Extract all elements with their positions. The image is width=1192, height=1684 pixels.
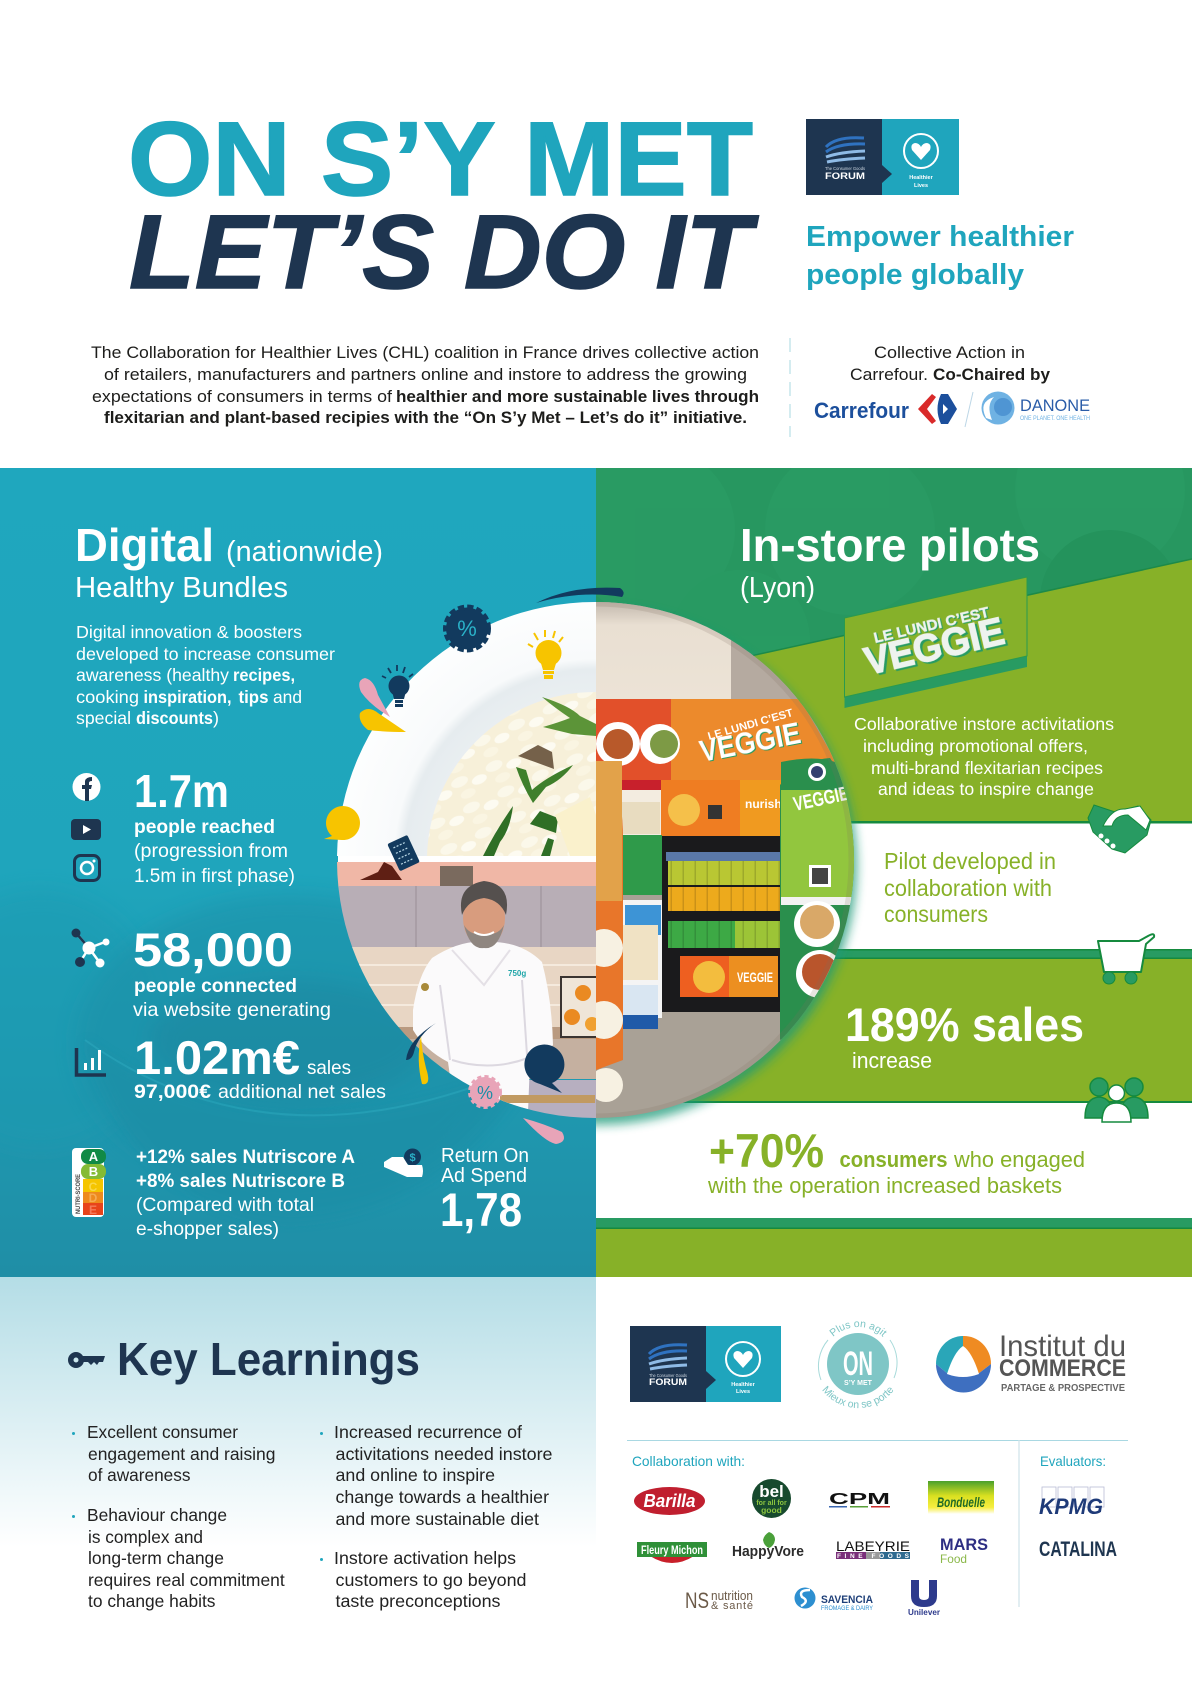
logo: Labeyrie [836, 1538, 910, 1560]
accent: yellow drop [360, 709, 406, 732]
digital description: tips [238, 687, 269, 707]
key learnings: right column: and more sustainable diet [336, 1509, 539, 1529]
stat: 58,000 connected: people connected [134, 975, 297, 997]
circle: store shelf photo: LE LUNDI C’EST [707, 707, 795, 743]
circle: store shelf photo: nurishh [745, 797, 789, 811]
digital heading: Digital [75, 519, 214, 571]
accent: pink drop [359, 678, 390, 717]
digital description: developed to increase consumer [76, 644, 335, 664]
accent: yellow swoosh [419, 1036, 428, 1084]
key learnings: left column: engagement and raising [88, 1444, 276, 1464]
stat: 1.7m reached: (progression from [134, 840, 288, 862]
co-chair text: Collective Action in [874, 343, 1025, 362]
digital description: awareness (healthy [76, 665, 229, 685]
logo: nutrition & sante: NS [685, 1588, 709, 1613]
in-store description: and ideas to inspire change [878, 779, 1094, 799]
logo: Savencia [794, 1588, 873, 1612]
digital description: and [273, 687, 302, 707]
stat: return on ad spend [440, 1145, 529, 1236]
logo: Labeyrie: LABEYRIE [836, 1538, 910, 1554]
icon: hand with coin: $ [409, 1152, 416, 1164]
circle: chef photo: 750g [508, 969, 526, 978]
logo: Consumer Goods Forum Healthier Lives: The Consumer Goods [825, 166, 866, 171]
tagline: people globally [806, 259, 1024, 291]
text: pilot developed [884, 848, 1056, 927]
circle: store shelf photo: VEGGIE [737, 969, 773, 985]
stat: +70% consumers: +70% [709, 1124, 824, 1177]
logo: Bel: for all for [756, 1500, 787, 1507]
stat: 1.02m sales: additional net sales [218, 1081, 386, 1103]
key learnings: right column: activitations needed instore [336, 1444, 552, 1464]
intro paragraph: flexitarian and plant-based recipies with the “On S’y Met – Let’s do it” initiative. [104, 408, 747, 427]
logo: Savencia: SAVENCIA [821, 1594, 873, 1606]
circle: chef photo [337, 862, 599, 1120]
stat: +70% consumers: consumers [840, 1147, 948, 1172]
logo: on s'y met badge: S’Y MET [844, 1380, 873, 1387]
icon: hand with coin [384, 1148, 423, 1177]
icon: shopping cart [1098, 934, 1154, 984]
logo: HappyVore: HappyVore [732, 1543, 804, 1560]
logo: Consumer Goods Forum Healthier Lives: FORUM [825, 171, 865, 181]
logo: institut du commerce: PARTAGE & PROSPECTIVE [1001, 1383, 1125, 1394]
digital description: recipes, [233, 665, 295, 685]
logo: Danone: ONE PLANET. ONE HEALTH [1020, 416, 1090, 422]
logo: Mars Food [940, 1535, 988, 1566]
in-store description: including promotional offers, [863, 736, 1088, 756]
logo: Labeyrie: FINE FOODS [837, 1553, 910, 1560]
intro paragraph: expectations of consumers in terms of [92, 387, 392, 406]
icon: nutri-score: B [89, 1164, 98, 1179]
stat: 1.02m sales [134, 1031, 386, 1103]
text: pilot developed: collaboration with [884, 875, 1052, 901]
icon: bar chart [76, 1048, 106, 1075]
heading: key learnings: Key Learnings [117, 1333, 420, 1385]
stat: nutriscore sales: e-shopper sales) [136, 1218, 279, 1240]
icon: discount badge [446, 608, 488, 650]
label: evaluators: Evaluators: [1040, 1453, 1106, 1469]
in-store heading: (Lyon) [740, 572, 815, 604]
intro paragraph: The Collaboration for Healthier Lives (CHL) coalition in France drives collective action [91, 343, 759, 362]
icon: nutri-score [72, 1148, 106, 1217]
icon: facebook [72, 773, 100, 801]
logo: Carrefour [814, 394, 957, 424]
accent: yellow speech bubble [324, 806, 360, 840]
icon: pink discount badge [470, 1077, 500, 1107]
icon: nutri-score: D [89, 1191, 98, 1205]
key learnings: left column: Behaviour change [87, 1505, 227, 1525]
circle: store shelf photo: VEGGIE [697, 715, 803, 769]
accent: navy swoosh [406, 1023, 436, 1060]
title: On S'y Met / Let's do it: LET’S DO IT [129, 194, 759, 311]
key learnings: left column [72, 1422, 285, 1611]
key learnings: right column: and online to inspire [336, 1465, 495, 1485]
stat: 1.7m reached: 1.7m [134, 765, 229, 817]
logo: on s'y met badge [818, 1321, 898, 1408]
logo: Consumer Goods Forum Healthier Lives: Lives [914, 183, 928, 189]
digital heading [75, 519, 383, 604]
logo: HappyVore [732, 1532, 804, 1560]
logo: nutrition & sante: & santé [711, 1600, 753, 1612]
icon: nutri-score: NUTRI-SCORE [76, 1174, 82, 1214]
stat: 58,000 connected: via website generating [133, 999, 331, 1021]
logo: Unilever: Unilever [908, 1608, 940, 1617]
logo: Bonduelle: Bonduelle [937, 1494, 985, 1510]
logo: on s'y met badge: Mieux on se porte [822, 1386, 894, 1408]
title: On S'y Met / Let's do it: ON S’Y MET [128, 101, 753, 218]
stat: return on ad spend: Return On [441, 1145, 529, 1167]
stat: +70% consumers: who engaged [953, 1147, 1085, 1172]
in-store description: Collaborative instore activitations [854, 714, 1114, 734]
logo: Fleury Michon: Fleury Michon [641, 1543, 703, 1557]
logo: Consumer Goods Forum Healthier Lives [806, 119, 959, 195]
stat: 189% sales: 189% sales [845, 998, 1084, 1051]
icon: handshake [1088, 805, 1151, 853]
intro paragraph: of retailers, manufacturers and partners online and instore to address the growing [104, 365, 747, 384]
logo: Danone [982, 392, 1090, 424]
key learnings: left column: of awareness [88, 1465, 191, 1485]
key learnings: left column: Excellent consumer [87, 1422, 238, 1442]
logo: Barilla: Barilla [644, 1491, 696, 1511]
band: white consumers row [596, 1101, 1192, 1218]
icon: network [72, 928, 110, 968]
sign: le lundi c'est veggie: LE LUNDI C’EST [872, 604, 991, 647]
digital description: discounts [136, 708, 213, 728]
in-store heading [740, 519, 1040, 604]
text: pilot developed: Pilot developed in [884, 848, 1056, 874]
stat: 189% sales: increase [852, 1048, 932, 1073]
logo: CPM [829, 1491, 890, 1508]
logo: on s'y met badge: ON [843, 1345, 873, 1383]
stat: 58,000 connected [133, 923, 331, 1021]
text: pilot developed: consumers [884, 901, 988, 927]
logo: nutrition & sante: nutrition [711, 1588, 753, 1603]
logo: Consumer Goods Forum lower: Lives [736, 1389, 750, 1395]
logo: nutrition & sante [685, 1588, 753, 1613]
logo: institut du commerce: COMMERCE [999, 1355, 1126, 1382]
key learnings: left column: requires real commitment [88, 1570, 285, 1590]
key learnings: right column: customers to go beyond [336, 1570, 526, 1590]
logo: Bel: good [761, 1505, 782, 1515]
stat: return on ad spend: 1,78 [440, 1183, 522, 1236]
icon: nutri-score: C [89, 1180, 98, 1194]
stat: +70% consumers [707, 1124, 1085, 1198]
icon: nutri-score: E [89, 1203, 97, 1217]
in-store description [854, 714, 1114, 799]
stat: 58,000 connected: 58,000 [133, 923, 293, 976]
tagline [806, 221, 1074, 291]
icon: nutri-score: A [89, 1149, 99, 1164]
logo: Consumer Goods Forum lower: The Consumer Goods [649, 1373, 688, 1378]
logo: on s'y met badge: Plus on agit [829, 1321, 886, 1337]
logo: KPMG: KPMG [1039, 1494, 1103, 1519]
band: green divider [596, 949, 1192, 959]
band: lower green divider [596, 1218, 1192, 1229]
plate shadow [596, 655, 865, 1133]
key learnings: left column: to change habits [88, 1591, 216, 1611]
logo: CPM: CPM [829, 1491, 890, 1508]
stat: 1.7m reached: 1.5m in first phase) [134, 865, 295, 887]
panel: digital background [0, 468, 596, 1277]
key learnings: right column: Increased recurrence of [334, 1422, 522, 1442]
logo: institut du commerce [936, 1330, 1126, 1394]
logo: Barilla [634, 1487, 705, 1515]
title: On S'y Met / Let's do it [128, 101, 759, 311]
digital description: inspiration, [144, 687, 232, 707]
key learnings: left column: long-term change [88, 1548, 224, 1568]
digital description: Digital innovation & boosters [76, 622, 302, 642]
stat: nutriscore sales: (Compared with total [136, 1194, 314, 1216]
logo: Mars Food: MARS [940, 1535, 988, 1554]
logo: Fleury Michon [637, 1542, 707, 1563]
logo: Consumer Goods Forum Healthier Lives: Healthier [909, 175, 934, 181]
digital heading: (nationwide) [226, 536, 383, 568]
sign: le lundi c'est veggie [844, 577, 1027, 708]
tagline: Empower healthier [806, 221, 1074, 253]
sign: le lundi c'est veggie: VEGGIE [860, 610, 1008, 684]
intro paragraph: healthier and more sustainable lives through [396, 387, 759, 406]
in-store heading: In-store pilots [740, 519, 1040, 571]
icon: navy bulb [382, 665, 413, 707]
logo: Consumer Goods Forum lower [630, 1326, 781, 1402]
digital description: special [76, 708, 131, 728]
stat: nutriscore sales: +8% sales Nutriscore B [136, 1170, 345, 1192]
digital heading: Healthy Bundles [75, 572, 288, 604]
logo: Consumer Goods Forum lower: FORUM [649, 1377, 687, 1387]
white divider in plate [338, 856, 596, 862]
stat: return on ad spend: Ad Spend [441, 1165, 527, 1187]
logo: Savencia: FROMAGE & DAIRY [821, 1606, 873, 1612]
stat: 189% sales [845, 998, 1084, 1073]
logo: Unilever [908, 1580, 940, 1617]
stat: 1.02m sales: 97,000€ [134, 1081, 211, 1103]
logo: Bel [752, 1479, 791, 1518]
stat: 1.7m reached [134, 765, 295, 887]
logo: Carrefour: Carrefour [814, 398, 909, 423]
key learnings: right column: Instore activation helps [334, 1548, 516, 1568]
key learnings: right column: taste preconceptions [336, 1591, 501, 1611]
circle: store shelf photo [596, 602, 854, 1118]
accent: navy arc above plate [536, 588, 624, 603]
logo: Danone: DANONE [1020, 396, 1090, 415]
panel: key learnings background [0, 1277, 596, 1547]
co-chair text: Carrefour. [850, 365, 928, 384]
icon: people group [1085, 1078, 1148, 1122]
key learnings: left column: is complex and [88, 1527, 203, 1547]
icon: pink discount badge: % [477, 1083, 493, 1103]
logo: Mars Food: Food [940, 1552, 967, 1566]
icon: youtube [71, 819, 101, 840]
stat: 1.7m reached: people reached [134, 816, 275, 838]
accent: pink drop lower [523, 1118, 564, 1144]
icon: discount badge: % [457, 616, 477, 641]
stat: nutriscore sales [136, 1146, 355, 1240]
logo: Consumer Goods Forum lower: Healthier [731, 1382, 756, 1388]
icon: yellow bulb [528, 630, 563, 679]
key learnings: right column [320, 1422, 552, 1611]
digital description: cooking [76, 687, 139, 707]
band: white pilot row [596, 821, 1192, 949]
panel: in-store background [596, 468, 1192, 1277]
label: collaboration with: Collaboration with: [632, 1453, 745, 1469]
logo: Bonduelle [928, 1481, 994, 1514]
co-chair text: Co-Chaired by [933, 365, 1051, 384]
logo: Bel: bel [759, 1482, 784, 1501]
stat: 1.02m sales: 1.02m€ [134, 1031, 300, 1084]
stat: nutriscore sales: +12% sales Nutriscore A [136, 1146, 355, 1168]
co-chair text [850, 343, 1051, 384]
icon: recipe document [387, 835, 420, 871]
circle: risotto plate photo [337, 602, 596, 856]
intro paragraph [91, 343, 759, 427]
logo: Catalina: CATALINA [1039, 1538, 1117, 1561]
digital description [76, 622, 335, 728]
accent: navy speech bubble [524, 1044, 564, 1093]
digital description: ) [213, 708, 219, 728]
logo: institut du commerce: Institut du [999, 1330, 1126, 1363]
in-store description: multi-brand flexitarian recipes [871, 758, 1103, 778]
stat: 1.02m sales: sales [307, 1057, 351, 1079]
stat: +70% consumers: with the operation increased baskets [707, 1173, 1062, 1198]
icon: instagram [74, 856, 100, 880]
circle: store shelf photo: VEGGIE [791, 783, 851, 816]
key learnings: right column: change towards a healthier [336, 1487, 549, 1507]
